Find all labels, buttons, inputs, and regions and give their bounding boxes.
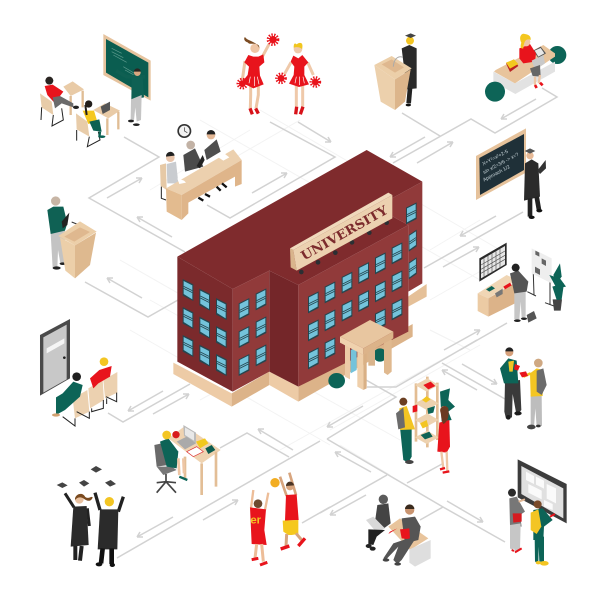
student in yellow with laptop [76,100,120,147]
building walls [177,182,422,392]
graduate woman [65,493,89,526]
potted plant [553,299,562,311]
blackboard with formulas: X+Y²=x²+2-5 [481,149,510,167]
cheerleader left [239,36,277,114]
big notice board and students [508,459,567,566]
girl at board [509,497,525,527]
student in red at desk [40,77,84,126]
entrance porch [340,320,393,390]
green chalkboard [103,34,151,101]
left bottom scenes [40,319,305,567]
student on bench with laptop [485,34,566,102]
boy at board [533,508,553,540]
bookshelf scene [396,377,455,473]
cheerleaders [239,36,319,114]
university sign: UNIVERSITY [298,202,391,263]
university sign [290,193,392,271]
bottom right scenes [366,347,567,567]
graduate teacher at board [524,148,546,219]
right column scenes [374,33,566,323]
blackboard with formulas: sin x/2=3/6 -> x=? [482,152,520,176]
standing man [514,290,526,320]
windows [183,202,417,376]
students on bench [366,495,431,567]
basketball players: er [250,514,262,526]
cheerleader right [278,43,319,114]
graduate at podium [374,33,417,110]
judges connector [207,122,335,218]
graduate man [95,493,123,512]
classroom: teacher and students [40,34,242,278]
bottom right connectors [367,340,505,399]
pin board [533,253,550,305]
blackboard with formulas [476,128,526,200]
door [40,319,70,396]
judges panel [160,124,242,220]
building roof [177,150,422,289]
building: university [173,150,427,407]
teacher [116,68,145,126]
secretary at desk [154,425,221,495]
right lower connector [460,323,507,350]
graduates [57,466,123,567]
sign lamps [299,220,389,274]
clock [177,124,191,138]
bush [328,373,345,388]
lecturer at podium [47,196,97,278]
top right connector [393,88,557,163]
left connectors [108,384,190,422]
book exchange students [500,347,547,429]
right connector [424,212,523,268]
connector lines and arrows [85,88,557,558]
notice boards and cabinet scene [478,243,566,323]
basketball players [250,473,305,565]
blackboard with formulas: Approach 1/2 [482,164,511,183]
arrows [107,99,536,537]
top left connector [89,137,185,252]
waiting on chairs [52,357,117,426]
faint isometric floor grid [120,110,500,475]
building base [173,284,427,407]
